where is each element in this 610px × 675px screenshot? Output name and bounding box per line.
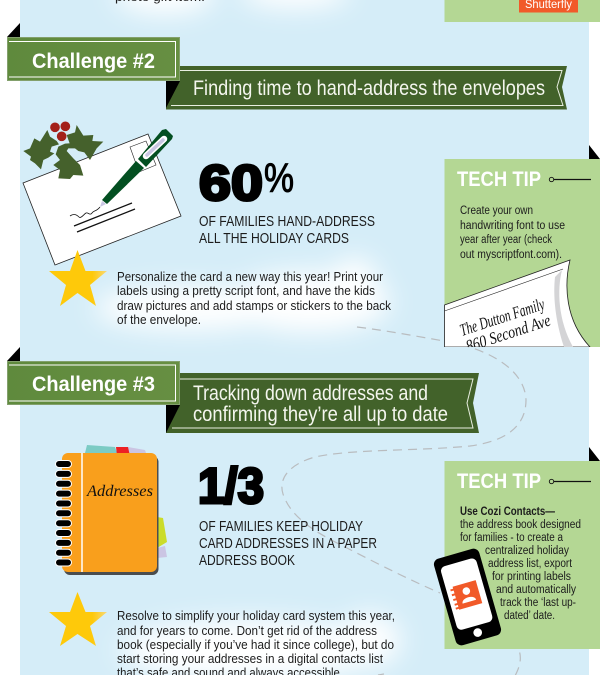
address lines [74,203,135,232]
advice paragraph: labels using a pretty script font, and have the kids [117,283,375,298]
statistic caption: CARD ADDRESSES IN A PAPER [199,536,377,552]
statistic caption: OF FAMILIES HAND-ADDRESS [199,214,375,230]
book cover [62,453,157,572]
book title: Addresses [86,483,153,500]
statistic caption [199,519,377,569]
advice paragraph: draw pictures and add stamps or stickers to the back [117,298,391,313]
dashed route line continued [378,628,520,675]
subtitle banner [166,373,479,433]
panel: tech tip 2 [444,159,600,356]
panel: tech tip 2: out myscriptfont.com). [460,249,562,261]
statistic caption: ADDRESS BOOK [199,553,295,569]
advice paragraph: start storing your addresses in a digital contacts list [117,651,383,666]
icon: star [49,250,107,306]
spiral binding [56,460,72,566]
panel: tech tip 3: the address book designed [460,519,581,531]
advice paragraph: of the envelope. [117,312,201,327]
berries [50,121,70,141]
envelope illustration [444,260,590,356]
statistic: 60 percent [199,155,294,211]
fold triangle [7,347,20,361]
icon: smartphone with contacts app [433,547,502,647]
holly leaves [23,121,103,179]
advice paragraph: Personalize the card a new way this year! Print your [117,269,384,284]
pen [100,129,173,207]
panel: tech tip 3: Use Cozi Contacts— [460,506,555,518]
panel: tech tip 3: centralized holiday [485,545,569,557]
stamp outline [130,141,156,172]
statistic caption [199,214,375,247]
panel: tech tip 3: dated’ date. [504,610,555,622]
panel: tech tip 2: Create your own [460,205,533,217]
panel: tech tip 3: for families - to create a [460,532,564,544]
panel: tech tip 3: address list, export [488,558,573,570]
subtitle banner [166,66,567,110]
fold triangle [589,145,600,159]
panel: tech tip 3: for printing labels [492,571,571,583]
icon: address book [56,445,167,575]
fold triangle [589,447,600,461]
book shadow [64,456,158,575]
envelope [23,134,181,265]
statistic caption: ALL THE HOLIDAY CARDS [199,231,349,247]
icon: star [49,592,107,646]
dashed route line [282,327,526,593]
fold triangle [7,23,20,37]
panel: tech tip 3 [444,461,600,649]
advice paragraph: and for years to come. Don’t get rid of the address [117,623,377,638]
challenge label [7,361,180,405]
panel: tech tip 2: handwriting font to use [460,220,565,232]
challenge label: Challenge #3 [32,373,155,396]
challenge label: Challenge #2 [32,50,155,73]
panel: tech tip 3: track the ‘last up- [500,597,576,609]
advice paragraph [117,269,391,327]
subtitle banner: Finding time to hand-address the envelopes [193,77,545,100]
statistic: 60 percent: 60 [199,155,263,211]
panel: tech tip 3: and automatically [496,584,576,596]
advice paragraph [117,608,395,675]
panel: tech tip 3: TECH TIP [457,470,541,493]
envelope illustration: The Dutton Family [457,294,547,340]
challenge label [7,37,180,81]
subtitle banner: confirming they’re all up to date [193,403,448,426]
statistic: 60 percent: % [264,155,294,201]
challenge 3 header [7,347,479,433]
top tip panel [444,0,600,22]
icon: envelope with holly and pen [23,121,181,265]
advice paragraph: Resolve to simplify your holiday card system this year, [117,608,395,623]
subtitle banner: Tracking down addresses and [193,382,428,405]
panel: tech tip 2: year after year (check [460,234,552,246]
statistic caption: OF FAMILIES KEEP HOLIDAY [199,519,363,535]
challenge 2 header [7,23,567,110]
contacts app glyph [450,580,482,611]
white cloud glows [95,0,400,675]
statistic: one third: 1/3 [198,458,264,514]
handwriting squiggle [70,207,100,217]
envelope illustration: 860 Second Ave [463,310,553,356]
advice paragraph: book (especially if you’ve had it since college), but do [117,637,394,652]
panel: tech tip 2: TECH TIP [457,168,541,191]
index tabs [85,445,117,453]
